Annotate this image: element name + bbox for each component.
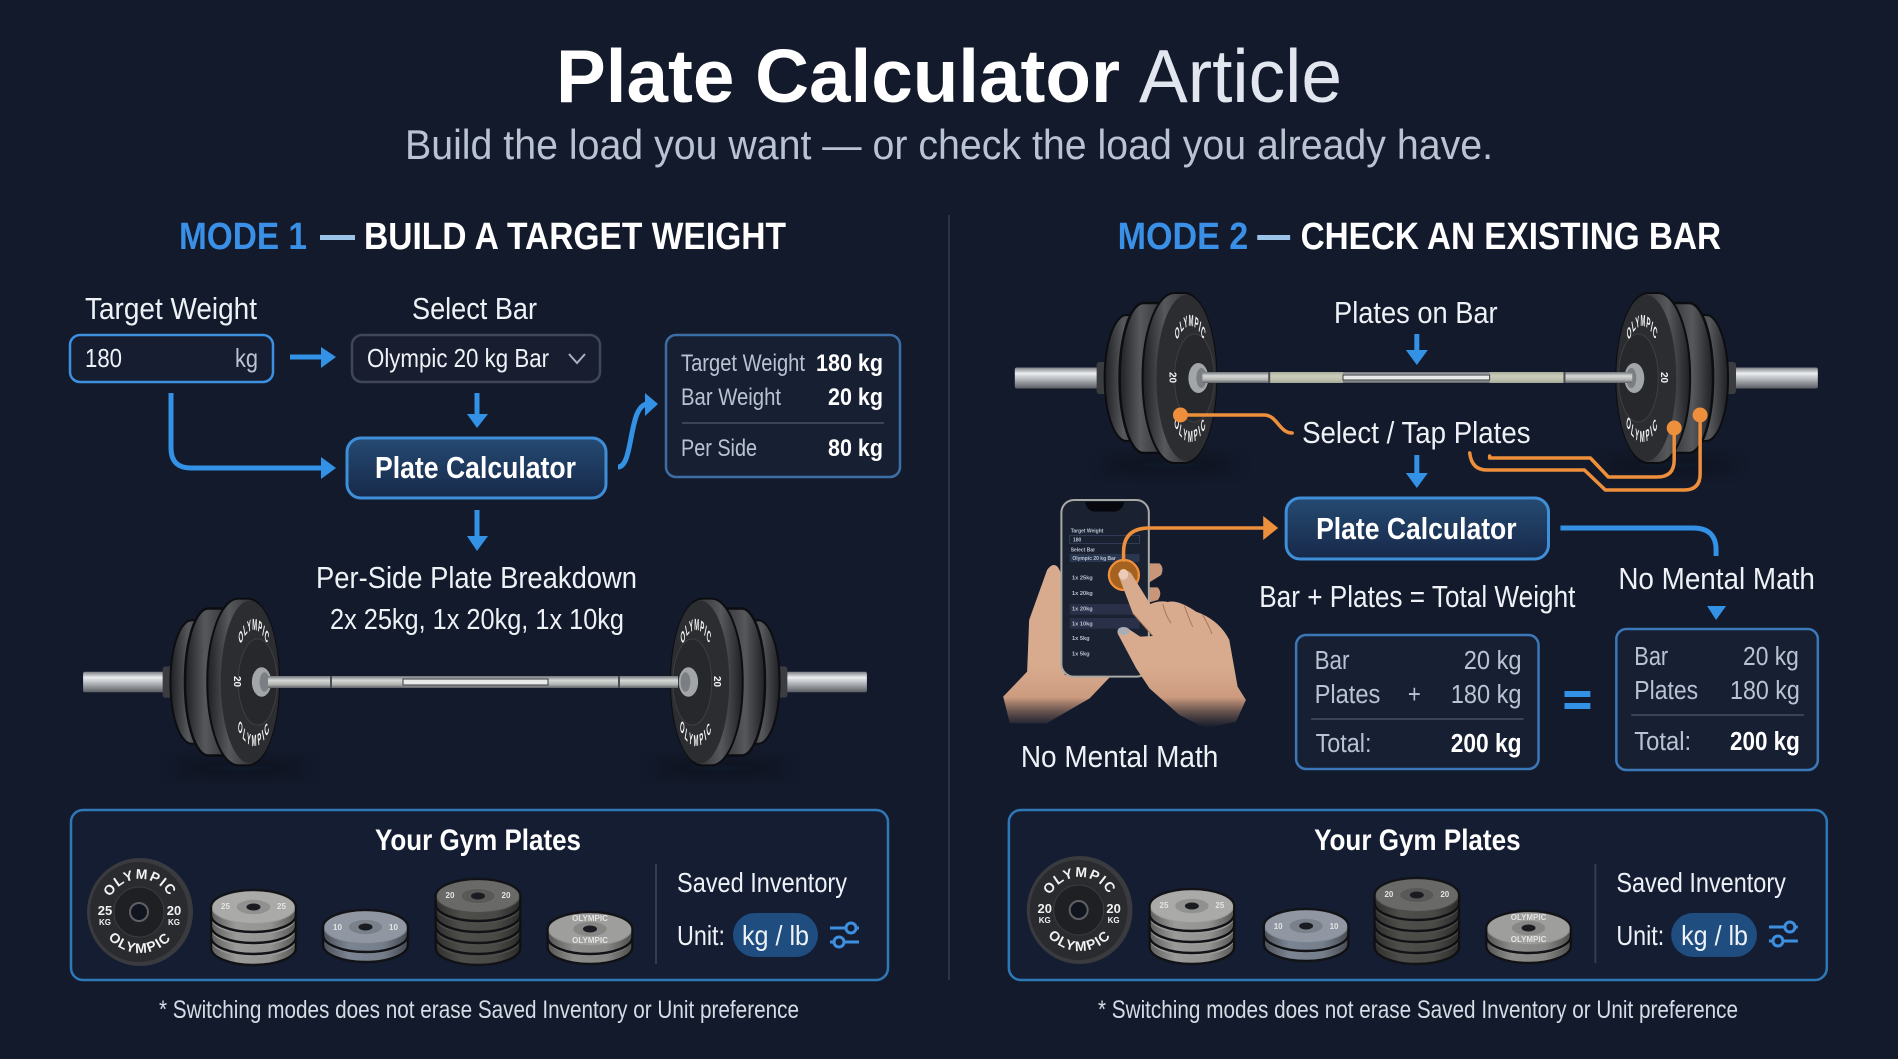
- arrow: input to calculator: [171, 393, 336, 479]
- no mental math label, left: No Mental Math: [1021, 739, 1218, 774]
- arrow: select to calculator: [1406, 455, 1428, 488]
- total box B: Total:: [1634, 726, 1691, 756]
- total box B: 20 kg: [1743, 641, 1799, 671]
- footnote: mode 2: * Switching modes does not erase Saved Inventory or Unit preference: [1098, 996, 1738, 1024]
- phone in hands illustration: Select Bar: [1071, 548, 1095, 554]
- panel: mode 2 flow: [1003, 216, 1820, 774]
- breakdown heading: Per-Side Plate Breakdown: [316, 560, 637, 595]
- big plate: [1026, 856, 1132, 964]
- plate stack: dark: 20: [1440, 890, 1450, 899]
- total box A: Plates: [1315, 679, 1380, 709]
- big plate: KG: [99, 918, 111, 927]
- total box B: 180 kg: [1730, 675, 1800, 705]
- plate calculator button: Plate Calculator: [1316, 511, 1517, 546]
- breakdown detail: 2x 25kg, 1x 20kg, 1x 10kg: [330, 604, 624, 636]
- plate stack: grey: OLYMPIC: [1511, 935, 1547, 944]
- select bar label: Select Bar: [412, 291, 537, 326]
- title: Article: [1139, 34, 1342, 118]
- arrowhead: to result box: [1707, 606, 1726, 620]
- unit toggle: kg / lb: [742, 920, 809, 951]
- barbell: mode 2: 20: [1166, 372, 1177, 384]
- title: Plate Calculator: [556, 34, 1120, 118]
- big plate: OLYMPIC: [1044, 867, 1115, 893]
- big plate: KG: [168, 918, 180, 927]
- plate stack: light: [1150, 889, 1234, 964]
- barbell: mode 1: 20: [231, 676, 242, 688]
- barbell: mode 2: OLYMPIC: [1626, 418, 1658, 442]
- unit toggle: [677, 913, 818, 957]
- plate stack: grey: [548, 912, 632, 964]
- heading: mode 2: [1118, 216, 1721, 258]
- plate stack: blue grey: [323, 910, 408, 962]
- barbell: mode 1: OLYMPIC: [238, 722, 269, 746]
- total box A: 20 kg: [1464, 645, 1522, 675]
- heading: mode 1: [179, 216, 786, 258]
- phone in hands illustration: Target Weight: [1071, 529, 1104, 535]
- target weight label: Target Weight: [85, 291, 257, 326]
- no mental math label, right: No Mental Math: [1618, 561, 1815, 596]
- plate calculator button: [347, 438, 606, 498]
- plate calculator button: [1286, 498, 1549, 559]
- barbell: mode 1: [83, 598, 867, 773]
- big plate: 25: [98, 903, 112, 918]
- gym plates heading: Your Gym Plates: [375, 824, 581, 857]
- panel: mode 1 flow: [68, 216, 902, 773]
- summary box: 180 kg: [816, 350, 883, 377]
- total box A: [1296, 635, 1539, 769]
- gym plates heading: Your Gym Plates: [1314, 824, 1521, 857]
- summary box: Bar Weight: [681, 384, 781, 411]
- total box A: Bar: [1315, 645, 1350, 675]
- heading: mode 1: BUILD A TARGET WEIGHT: [364, 216, 786, 258]
- plate stack: grey: [1486, 911, 1571, 963]
- plate stack: dark: 20: [1384, 890, 1394, 899]
- total box B: Bar: [1634, 641, 1668, 671]
- big plate: 20: [167, 903, 181, 918]
- phone in hands illustration: 1x 5kg: [1072, 636, 1090, 642]
- footnote: mode 1: * Switching modes does not erase Saved Inventory or Unit preference: [159, 996, 799, 1024]
- big plate: 20: [1038, 901, 1052, 916]
- target weight input: [70, 335, 273, 382]
- saved inventory label: Saved Inventory: [677, 867, 847, 898]
- unit toggle: [1616, 913, 1757, 957]
- plate stack: grey: OLYMPIC: [572, 914, 608, 923]
- barbell: mode 2: [1014, 292, 1818, 512]
- plate stack: blue grey: 10: [333, 923, 342, 932]
- icon: sliders: [1769, 922, 1798, 946]
- heading: mode 1: MODE 1: [179, 216, 307, 258]
- plate stack: light: 25: [221, 902, 230, 911]
- phone in hands illustration: 1x 20kg: [1072, 591, 1093, 597]
- barbell: mode 1: OLYMPIC: [680, 722, 711, 746]
- arrow: input to select: [290, 347, 336, 368]
- phone in hands illustration: 1x 5kg: [1072, 652, 1090, 658]
- phone in hands illustration: [1003, 500, 1246, 728]
- total box B: Plates: [1634, 675, 1698, 705]
- plate stack: blue grey: 10: [389, 923, 398, 932]
- phone in hands illustration: 1x 20kg: [1072, 607, 1093, 613]
- select plates label: Select / Tap Plates: [1302, 415, 1531, 450]
- big plate: OLYMPIC: [104, 869, 176, 895]
- bar select dropdown: Olympic 20 kg Bar: [367, 343, 549, 373]
- plate stack: grey: OLYMPIC: [572, 936, 608, 945]
- plate stack: dark: [1374, 878, 1459, 964]
- target weight input: 180: [85, 343, 122, 373]
- barbell: mode 1: OLYMPIC: [680, 618, 711, 643]
- big plate: KG: [1108, 916, 1120, 925]
- barbell: mode 1: 20: [711, 676, 722, 688]
- total box A: +: [1408, 679, 1421, 709]
- summary box: Per Side: [681, 435, 757, 462]
- big plate: KG: [1039, 916, 1051, 925]
- phone in hands illustration: 1x 10kg: [1072, 621, 1093, 627]
- target weight input: kg: [235, 343, 258, 373]
- total box B: 200 kg: [1730, 726, 1800, 756]
- plate stack: dark: [436, 879, 520, 965]
- barbell: mode 2: OLYMPIC: [1626, 314, 1658, 339]
- panel: your gym plates, mode 1: [70, 808, 890, 982]
- barbell: mode 1: OLYMPIC: [238, 618, 269, 643]
- total box A: Total:: [1316, 728, 1371, 758]
- plate stack: light: 25: [1160, 901, 1169, 910]
- plate stack: blue grey: 10: [1330, 922, 1339, 931]
- big plate: [87, 858, 193, 966]
- icon: sliders: [830, 923, 859, 947]
- panel: your gym plates, mode 2: [1008, 808, 1828, 982]
- plate stack: light: 25: [1215, 901, 1225, 910]
- plate stack: dark: 20: [446, 891, 455, 900]
- plate stack: light: [211, 890, 296, 965]
- phone in hands illustration: 180: [1073, 537, 1082, 543]
- summary box: [666, 335, 900, 477]
- plate stack: dark: 20: [502, 891, 511, 900]
- big plate: OLYMPIC: [1050, 931, 1109, 952]
- unit toggle: kg / lb: [1681, 920, 1748, 951]
- plate stack: light: 25: [277, 902, 286, 911]
- barbell: mode 2: OLYMPIC: [1174, 420, 1206, 442]
- summary box: 20 kg: [828, 384, 883, 411]
- barbell: mode 2: OLYMPIC: [1175, 314, 1206, 339]
- phone in hands illustration: 1x 25kg: [1072, 575, 1093, 581]
- arrow: select to calculator: [467, 393, 488, 428]
- connector: calculator to result: [1560, 528, 1716, 556]
- summary box: 80 kg: [828, 435, 883, 462]
- unit toggle: Unit:: [677, 920, 725, 951]
- heading: mode 2: MODE 2: [1118, 216, 1248, 258]
- arrow: calculator to summary: [618, 393, 658, 467]
- barbell: mode 2: 20: [1658, 372, 1669, 384]
- bar select dropdown: [352, 335, 600, 382]
- subtitle: Build the load you want — or check the load you already have.: [405, 121, 1493, 168]
- arrow: plates on bar: [1406, 334, 1428, 365]
- arrow: calculator to breakdown: [467, 510, 488, 551]
- formula label: Bar + Plates = Total Weight: [1259, 579, 1576, 614]
- summary box: Target Weight: [681, 350, 805, 377]
- orange connectors: plates to select label: [1173, 408, 1708, 490]
- plate stack: blue grey: 10: [1274, 922, 1283, 931]
- big plate: 20: [1106, 901, 1121, 916]
- total box A: 180 kg: [1451, 679, 1522, 709]
- orange connector: phone to calculator: [1124, 516, 1278, 560]
- plates on bar label: Plates on Bar: [1334, 295, 1498, 330]
- plate stack: grey: OLYMPIC: [1511, 913, 1547, 922]
- plate calculator button: Plate Calculator: [375, 450, 576, 485]
- equals sign: [1564, 691, 1590, 709]
- big plate: OLYMPIC: [110, 933, 170, 954]
- total box B: [1616, 629, 1818, 770]
- unit toggle: Unit:: [1616, 920, 1664, 951]
- total box A: 200 kg: [1451, 728, 1522, 758]
- heading: mode 2: CHECK AN EXISTING BAR: [1301, 216, 1721, 258]
- saved inventory label: Saved Inventory: [1616, 867, 1786, 898]
- phone in hands illustration: Olympic 20 kg Bar: [1072, 556, 1116, 562]
- plate stack: blue grey: [1264, 909, 1349, 961]
